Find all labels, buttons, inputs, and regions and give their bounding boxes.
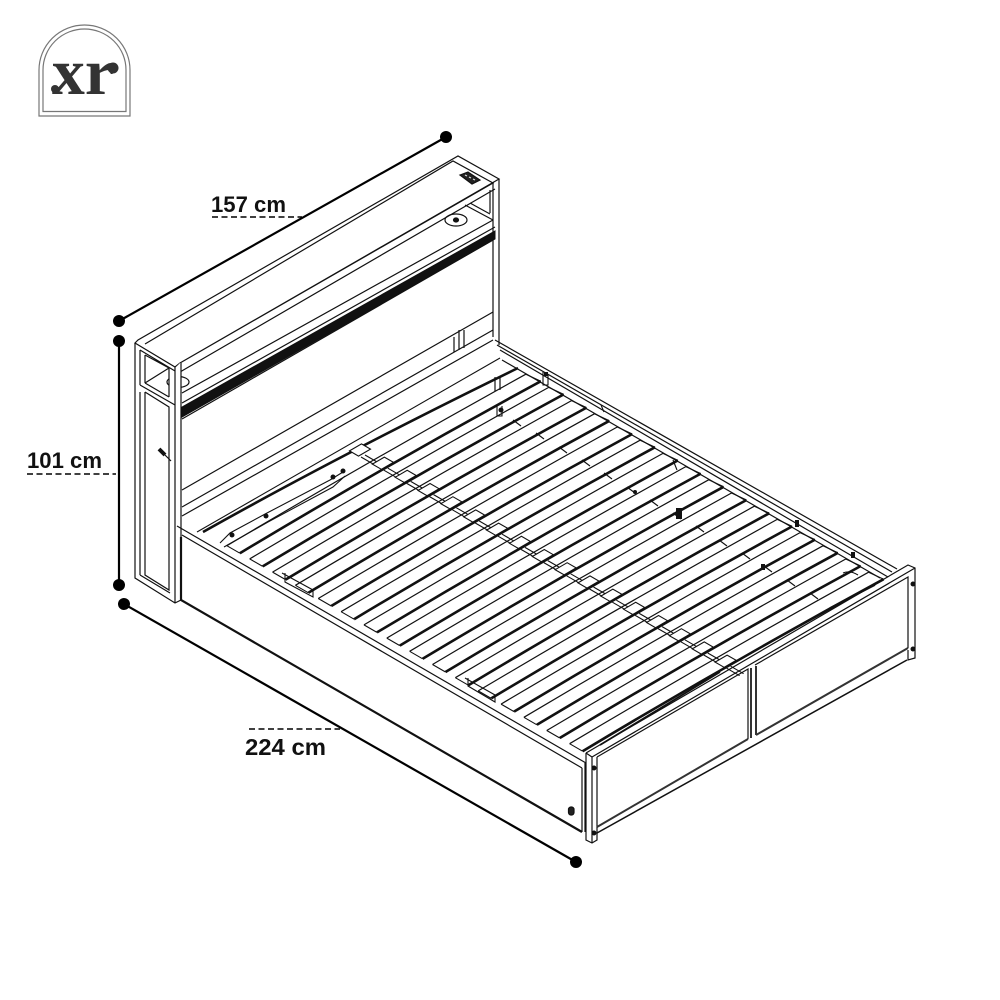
dimension: width 157 cm	[113, 131, 452, 327]
USB socket	[460, 172, 480, 184]
lock icon	[568, 807, 574, 815]
dimension: length 224 cm	[118, 598, 582, 868]
wireless charger: left	[167, 376, 189, 388]
bed side rail	[177, 340, 897, 832]
left post	[135, 343, 181, 603]
slats	[197, 358, 884, 751]
headboard rails	[180, 189, 495, 419]
logo: XR arch: xr	[52, 36, 114, 109]
dimension: height 101 cm: 101 cm	[27, 448, 102, 473]
drawer panel edges	[597, 648, 908, 827]
power cord	[159, 449, 171, 461]
dimension: height 101 cm	[27, 335, 125, 591]
hardware: cables and brackets	[220, 372, 875, 745]
slat joints	[513, 420, 818, 599]
logo: XR arch	[39, 25, 130, 116]
LED strip	[182, 231, 495, 417]
footboard	[586, 565, 916, 843]
first slat	[197, 358, 518, 532]
right post	[493, 179, 500, 391]
footboard bolts	[592, 582, 916, 836]
dimension: width 157 cm: 157 cm	[211, 192, 286, 217]
headboard	[135, 156, 500, 603]
dimension: length 224 cm: 224 cm	[245, 734, 326, 760]
headboard top surface	[135, 156, 499, 367]
back panel lines	[182, 312, 493, 516]
wireless charger: right	[445, 214, 467, 226]
